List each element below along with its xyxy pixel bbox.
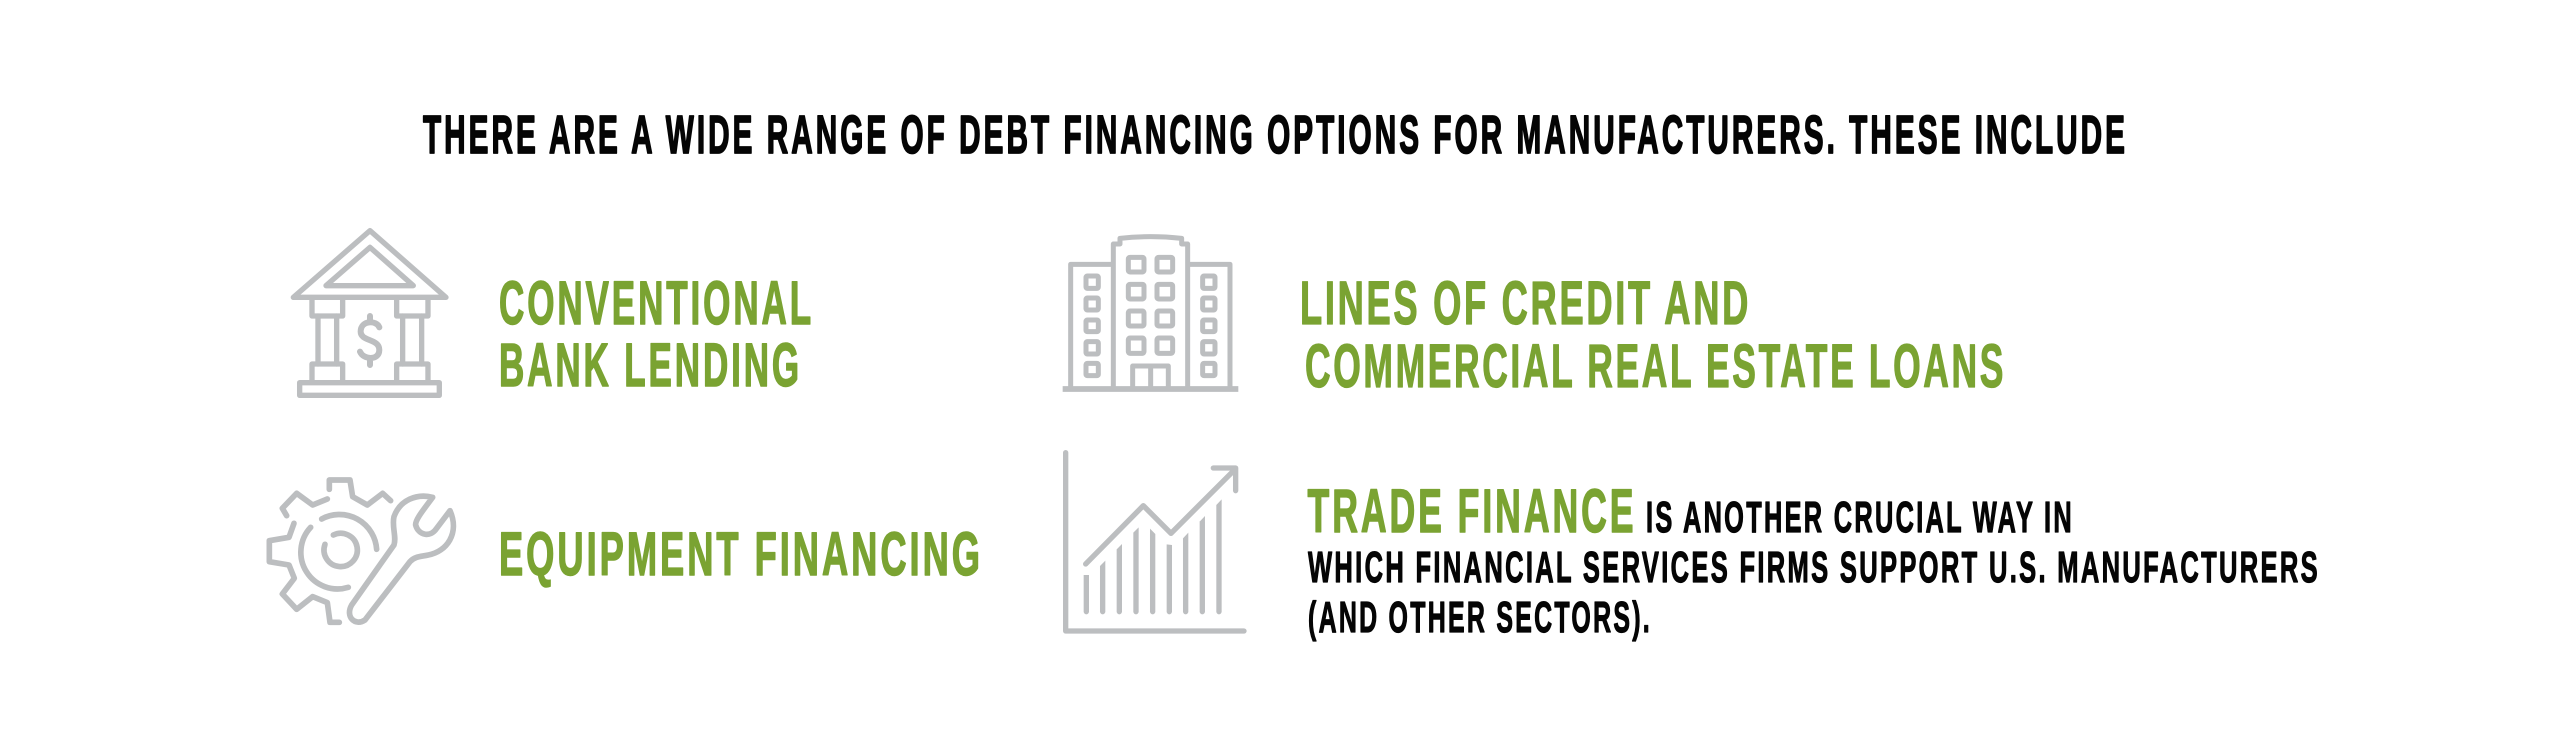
text block: trade finance: IS ANOTHER CRUCIAL WAY IN (1646, 493, 2074, 542)
icon: rising line and bar chart (1066, 453, 1244, 631)
heading: conventional bank lending (499, 269, 814, 399)
heading: lines of credit and commercial real estate loans: COMMERCIAL REAL ESTATE LOANS (1305, 332, 2006, 400)
icon: bank (293, 231, 446, 395)
text block: trade finance: (AND OTHER SECTORS). (1308, 593, 1652, 642)
text block: trade finance: TRADE FINANCE (1308, 477, 1636, 545)
heading: conventional bank lending: CONVENTIONAL (499, 269, 814, 337)
text block: trade finance (1308, 477, 2320, 642)
icon: gear and wrench (269, 480, 453, 622)
heading: lines of credit and commercial real estate loans: LINES OF CREDIT AND (1300, 269, 1751, 337)
heading: lines of credit and commercial real estate loans (1300, 269, 2006, 400)
heading: equipment financing: EQUIPMENT FINANCING (499, 520, 983, 588)
heading: conventional bank lending: BANK LENDING (499, 331, 802, 399)
icon: office buildings (1063, 237, 1238, 389)
